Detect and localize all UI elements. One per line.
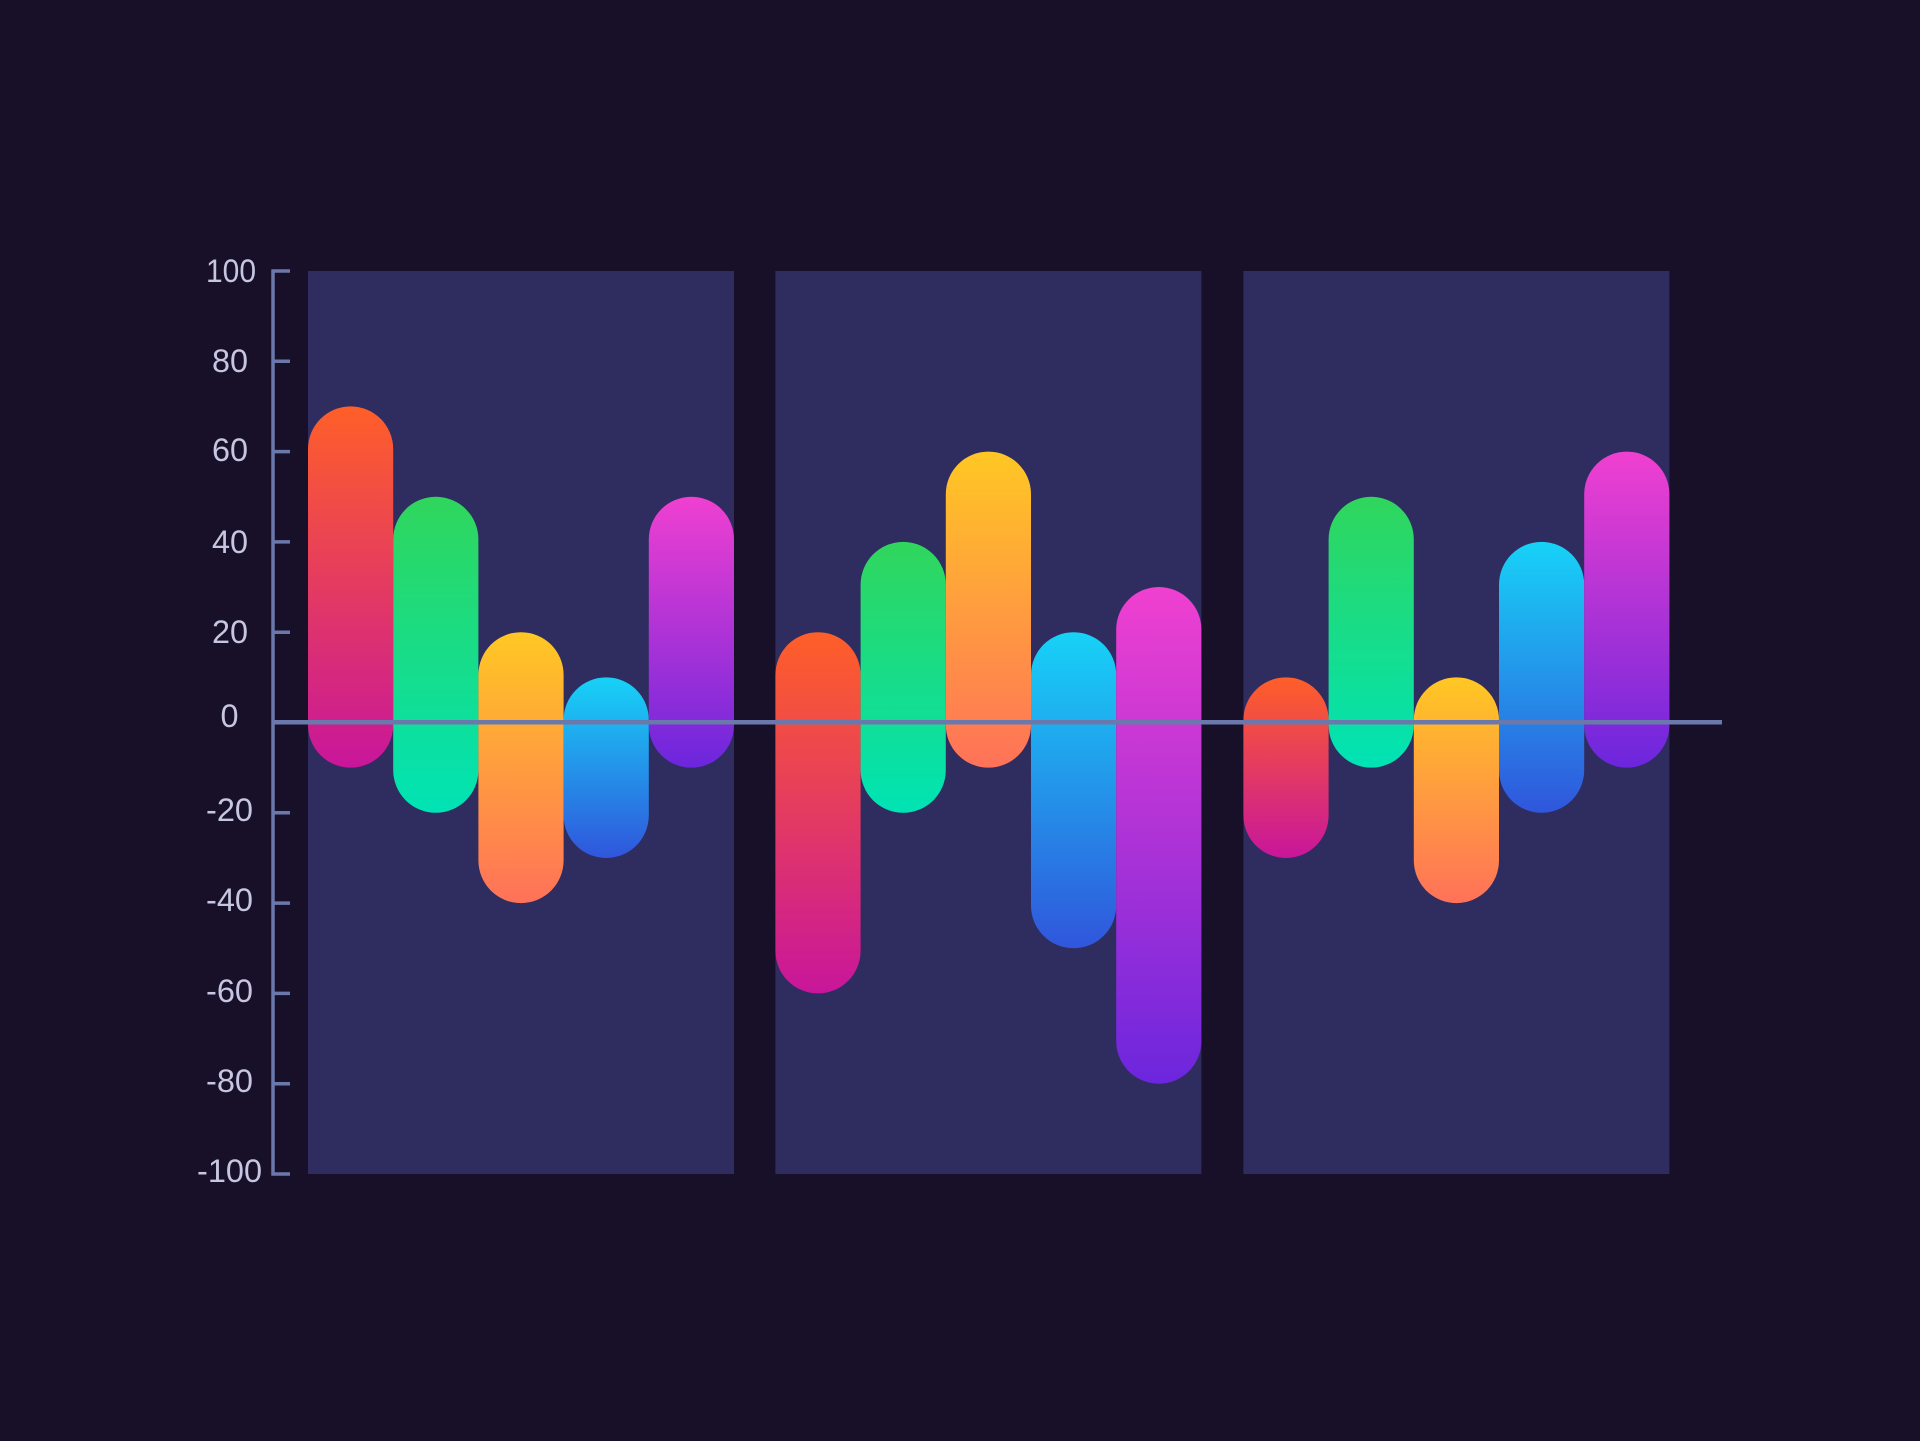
bar: group 1 yellow [478, 632, 564, 903]
panel: group 3 background [1243, 271, 1669, 1174]
bar: group 3 yellow [1414, 677, 1499, 903]
label: 20: 20 [212, 614, 248, 650]
label: -20: -20 [206, 792, 253, 828]
zero baseline [273, 720, 722, 724]
y axis with ticks [273, 271, 290, 1174]
bar: group 3 blue [1499, 542, 1584, 813]
label: -40: -40 [206, 882, 253, 918]
bar: group 3 red [1243, 677, 1329, 858]
bars: group 1 [308, 406, 734, 903]
bar: group 1 blue [564, 677, 649, 858]
bar: group 2 red [775, 632, 861, 993]
bar: group 3 purple [1584, 452, 1669, 768]
bar: group 2 blue [1031, 632, 1116, 948]
label: -60: -60 [206, 973, 253, 1009]
panel: group 1 background [308, 271, 734, 1174]
label: 100: 100 [206, 253, 256, 289]
bar: group 2 purple [1116, 587, 1201, 1084]
y axis labels [197, 253, 262, 1189]
label: 40: 40 [212, 524, 248, 560]
bar: group 2 yellow [946, 452, 1031, 768]
label: -100: -100 [197, 1153, 262, 1189]
bar: group 1 red [308, 406, 393, 768]
panel: group 2 background [775, 271, 1201, 1174]
label: 80: 80 [212, 343, 248, 379]
bar: group 1 purple [649, 497, 734, 768]
label: 60: 60 [212, 432, 248, 468]
bars: group 3 [1243, 452, 1669, 903]
bar: group 1 green [393, 497, 478, 813]
label: -80: -80 [206, 1063, 253, 1099]
bar: group 3 green [1329, 497, 1414, 768]
bars: group 2 [775, 452, 1201, 1084]
label: 0: 0 [220, 698, 238, 734]
bar: group 2 green [861, 542, 946, 813]
zero baseline segment [722, 720, 1722, 724]
